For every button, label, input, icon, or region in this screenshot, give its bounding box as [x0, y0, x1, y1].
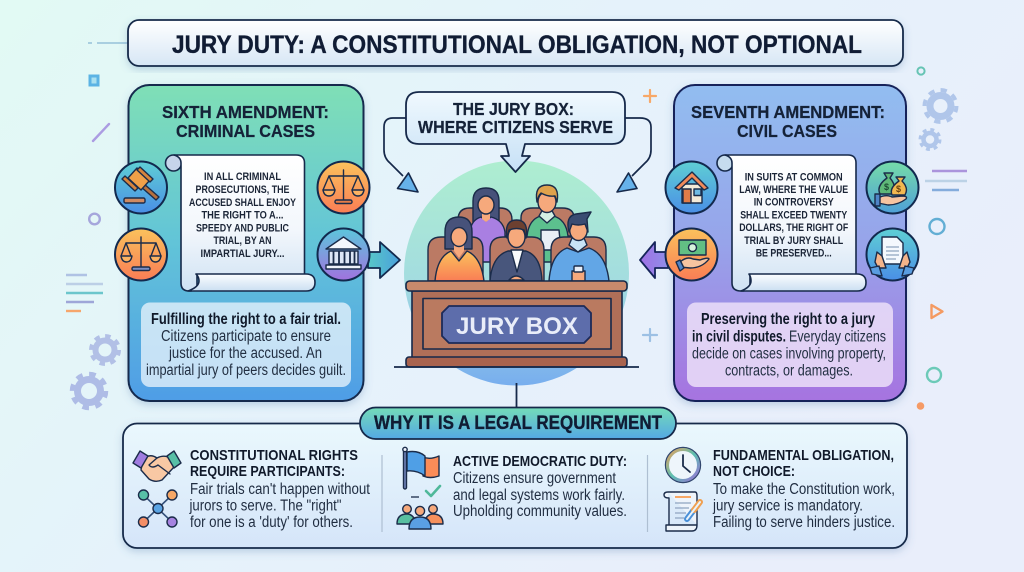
- caption: civil disputes: in civil disputes.: [692, 328, 786, 346]
- heading: seventh amendment: CIVIL CASES: [737, 121, 837, 141]
- scroll: seventh amendment text: IN CONTROVERSY: [754, 196, 834, 208]
- jury box desk: [394, 281, 639, 367]
- callout: the jury box: THE JURY BOX:: [453, 99, 574, 119]
- heading: sixth amendment: CRIMINAL CASES: [176, 121, 315, 141]
- panel: why it is a legal requirement: [123, 408, 907, 548]
- icon: scales top: [318, 162, 370, 214]
- caption: fair trial: Citizens participate to ensure: [161, 328, 331, 345]
- title: JURY DUTY: A CONSTITUTIONAL OBLIGATION, NOT OPTIONAL: [172, 31, 862, 59]
- icon: cash in hand: [666, 228, 718, 280]
- plaque: jury box: [442, 306, 591, 343]
- arrow: seventh amendment to jury box: [640, 242, 668, 278]
- text: constitutional rights: [189, 447, 371, 531]
- arrow: callout curved right: [617, 118, 651, 192]
- scroll: sixth amendment text: ACCUSED SHALL ENJOY: [189, 197, 297, 209]
- chairs back row: [458, 208, 574, 236]
- caption: fair trial: justice for the accused. An: [168, 345, 322, 362]
- panel: sixth amendment: [115, 85, 400, 401]
- caption: fair trial: impartial jury of peers decides guilt.: [146, 362, 346, 379]
- text: fundamental obligation: [712, 447, 895, 531]
- heading: sixth amendment: SIXTH AMENDMENT:: [162, 102, 329, 122]
- decorative accents left: [66, 43, 128, 311]
- icon: money bags: $: [884, 182, 889, 192]
- icon: gear large right: [924, 90, 956, 122]
- arrow: sixth amendment to jury box: [368, 242, 400, 278]
- icon: clock: [666, 448, 700, 482]
- caption: civil disputes: contracts, or damages.: [725, 362, 853, 380]
- illustration: jurors: [428, 185, 609, 281]
- text: constitutional rights: for one is a 'duty' for others.: [190, 514, 353, 531]
- scroll: seventh amendment text: LAW, WHERE THE VALUE: [739, 184, 848, 196]
- icon: people group: [397, 497, 443, 529]
- icon: house: [666, 162, 718, 214]
- caption: fair trial: Fulfilling the right to a fair trial.: [151, 311, 341, 328]
- title: [128, 20, 903, 66]
- banner: section heading: [360, 408, 676, 439]
- caption: civil disputes: Everyday citizens: [789, 328, 886, 346]
- banner: section heading: WHY IT IS A LEGAL REQUIREMENT: [374, 413, 662, 434]
- text: constitutional rights: REQUIRE PARTICIPANTS:: [190, 463, 345, 480]
- icon: scales bottom: [115, 228, 167, 280]
- text: fundamental obligation: NOT CHOICE:: [713, 463, 795, 480]
- icon: checkmark: [426, 486, 440, 496]
- text: active democratic duty: ACTIVE DEMOCRATIC DUTY:: [453, 453, 627, 470]
- juror: woman in purple: [470, 188, 505, 262]
- connector line: [516, 383, 518, 408]
- callout: the jury box: [406, 92, 625, 172]
- juror: woman in orange: [435, 217, 484, 281]
- icon: flag: [403, 447, 439, 489]
- icon: gavel: [115, 162, 167, 214]
- icon: money bags: $: [896, 184, 901, 194]
- juror: man in green: [527, 185, 568, 262]
- plaque: jury box: JURY BOX: [456, 313, 578, 340]
- chairs front row: [428, 237, 606, 281]
- text: constitutional rights: Fair trials can't happen without: [190, 481, 371, 498]
- scroll: sixth amendment text: SPEEDY AND PUBLIC: [196, 222, 289, 234]
- scroll: seventh amendment text: TRIAL BY JURY SHALL: [744, 235, 843, 247]
- icon: gear large left: [72, 374, 106, 408]
- text: constitutional rights: CONSTITUTIONAL RIGHTS: [190, 447, 358, 464]
- panel: seventh amendment: [640, 85, 918, 401]
- juror: man in suit: [490, 220, 542, 281]
- text: fundamental obligation: To make the Constitution work,: [713, 481, 895, 498]
- caption: civil disputes: decide on cases involving property,: [692, 346, 886, 362]
- text: active democratic duty: and legal systems work fairly.: [453, 487, 625, 504]
- scroll: sixth amendment text: IMPARTIAL JURY...: [200, 248, 284, 260]
- icon: document in hands: [866, 228, 918, 280]
- text: constitutional rights: jurors to serve. The "right": [189, 498, 342, 514]
- heading: sixth amendment: [162, 102, 329, 141]
- icon: document with chain: [664, 492, 700, 531]
- heading: seventh amendment: [691, 102, 885, 141]
- icon: courthouse: [318, 228, 370, 280]
- scroll: seventh amendment text: BE PRESERVED...: [756, 248, 832, 260]
- scroll: seventh amendment text: DOLLARS, THE RIGHT OF: [739, 222, 848, 234]
- text: active democratic duty: Citizens ensure government: [453, 470, 617, 487]
- scroll: sixth amendment text: PROSECUTIONS, THE: [196, 184, 290, 196]
- scroll: seventh amendment text: SHALL EXCEED TWENTY: [740, 210, 848, 222]
- heading: seventh amendment: SEVENTH AMENDMENT:: [691, 102, 885, 122]
- arrow: callout curved left: [384, 118, 418, 192]
- text: fundamental obligation: Failing to serve hinders justice.: [713, 514, 895, 531]
- scroll: sixth amendment text: TRIAL, BY AN: [214, 235, 272, 247]
- text: fundamental obligation: FUNDAMENTAL OBLIGATION,: [713, 447, 894, 464]
- icon: gear small left: [91, 336, 119, 364]
- icon: money bags: [866, 162, 918, 214]
- icon: network: [138, 490, 177, 527]
- scroll: sixth amendment text: IN ALL CRIMINAL: [204, 171, 281, 183]
- illustration circle: [404, 160, 629, 386]
- caption: civil disputes: Preserving the right to a jury: [701, 311, 875, 328]
- icon: handshake: [133, 451, 181, 481]
- callout: the jury box: WHERE CITIZENS SERVE: [418, 117, 613, 137]
- text: fundamental obligation: jury service is mandatory.: [712, 498, 863, 514]
- text: active democratic duty: [453, 453, 627, 520]
- icon: gear small right: [920, 130, 940, 150]
- scroll: seventh amendment text: [717, 155, 866, 291]
- decorative accents right: [643, 67, 967, 410]
- scroll: sixth amendment text: [166, 155, 315, 291]
- caption: fair trial: [141, 302, 351, 387]
- scroll: sixth amendment text: THE RIGHT TO A...: [202, 210, 284, 222]
- scroll: seventh amendment text: IN SUITS AT COMMON: [745, 172, 843, 184]
- caption: civil disputes: [687, 302, 893, 387]
- text: active democratic duty: Upholding community values.: [453, 503, 627, 520]
- juror: man in blue: [549, 212, 609, 281]
